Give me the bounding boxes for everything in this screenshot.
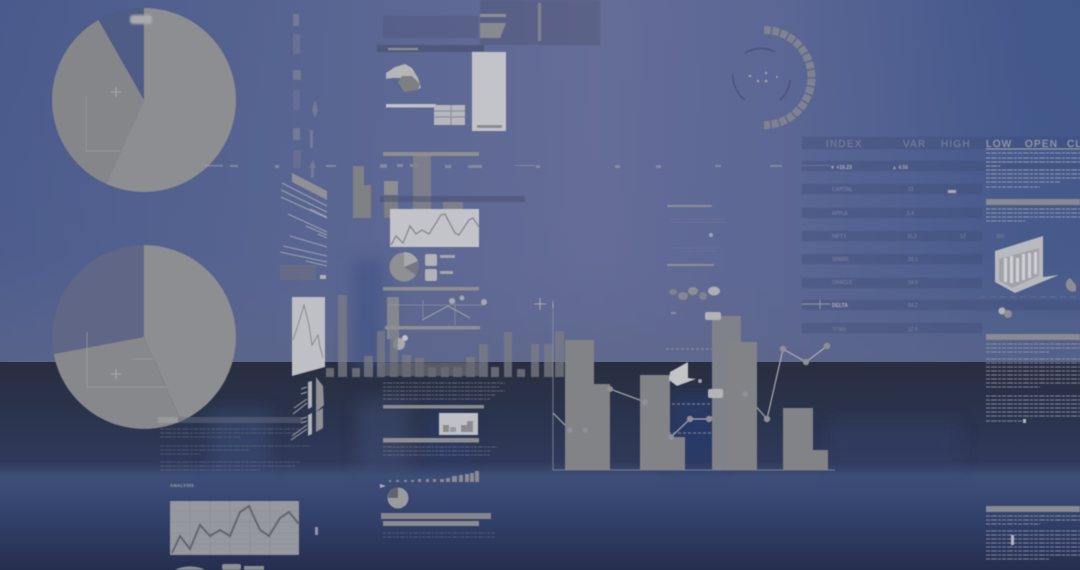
lower mini pie — [380, 484, 408, 508]
skewed text panel — [280, 173, 327, 280]
trend line — [553, 346, 827, 437]
main bar and line chart — [553, 300, 835, 470]
line chart panel: bottom left — [170, 501, 299, 555]
heading: analysis: ANALYSIS — [170, 483, 194, 488]
table rows: DELTA — [832, 303, 848, 309]
data table — [802, 137, 1080, 333]
table rows: 20.1 — [908, 257, 918, 263]
cross markers — [534, 298, 553, 310]
table rows: ▼ +16.23 — [830, 165, 852, 171]
text column right: lower — [986, 334, 1080, 423]
bar row along baseline — [326, 295, 564, 377]
pie chart: top — [52, 8, 236, 192]
table header — [826, 139, 1080, 150]
3D laptop mini chart — [669, 312, 723, 398]
table header: INDEX — [826, 139, 863, 150]
top dark header block — [377, 0, 600, 52]
bars — [565, 316, 828, 470]
table header: LOW — [986, 139, 1012, 150]
middle column chart with bars — [383, 287, 487, 350]
text column right: upper — [986, 149, 1080, 221]
text block bottom left — [158, 417, 310, 470]
table rows: SPARK — [832, 257, 849, 263]
table rows: 22 — [908, 187, 914, 193]
line chart panel — [390, 209, 479, 247]
pie chart: bottom — [52, 245, 236, 429]
radial gauge — [733, 30, 812, 125]
dotted data ticker across the middle — [205, 164, 830, 168]
table rows: TITAN — [832, 327, 846, 333]
table rows: ORACLE — [832, 280, 853, 286]
faint list column behind main chart — [666, 205, 725, 433]
small isometric bars — [353, 166, 371, 218]
table rows: 12 — [960, 234, 966, 240]
table rows: NIFTY — [832, 234, 847, 240]
table rows — [830, 165, 1005, 333]
table rows: 84.2 — [908, 303, 918, 309]
mini pie with legend — [390, 252, 455, 282]
small side panels with skewed legends — [291, 377, 324, 440]
tick — [315, 527, 318, 535]
table rows: 16.2 — [907, 234, 917, 240]
table rows: CAPITAL — [832, 187, 853, 193]
table rows: 350 — [996, 234, 1005, 240]
table header: OPEN — [1025, 139, 1058, 150]
left narrow column of mini widgets — [293, 14, 318, 178]
lower bands and text — [381, 513, 495, 537]
text block under baseline — [383, 383, 505, 399]
rising mini bars — [389, 471, 479, 482]
isometric 3D bar chart — [995, 236, 1076, 293]
table rows: APPLE — [832, 211, 849, 217]
bottom cropped icons — [175, 564, 264, 570]
text column right: bottom — [986, 506, 1080, 559]
line markers — [567, 343, 830, 440]
small table — [386, 104, 465, 125]
table header: VAR — [903, 139, 926, 150]
chart axes — [553, 300, 835, 470]
tall white panel with sparkline — [472, 52, 506, 131]
table rows: ▲ 4.56 — [892, 165, 908, 171]
table rows: 12.5 — [908, 327, 918, 333]
band with text lines — [383, 438, 498, 455]
table rows: 5.4 — [907, 211, 914, 217]
stacked bars and bands mid column — [380, 152, 525, 220]
blob map icon — [386, 64, 421, 92]
band and mini bar panel — [383, 405, 484, 435]
white vertical line chart panel — [292, 297, 325, 376]
table rows: 34.5 — [908, 280, 918, 286]
small cluster icon — [980, 297, 1080, 318]
table header: HIGH — [941, 139, 971, 150]
